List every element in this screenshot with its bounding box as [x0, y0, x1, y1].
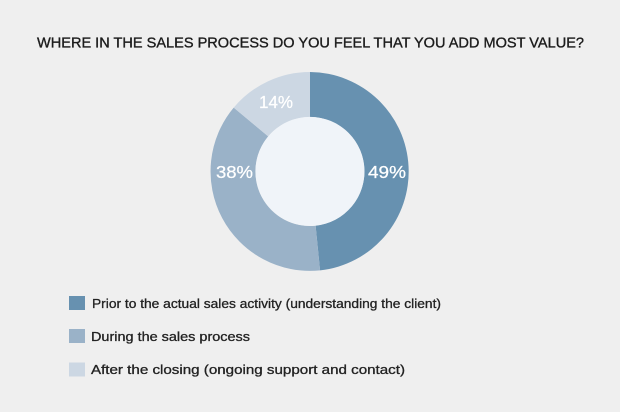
legend item: after: After the closing (ongoing support and contact)	[91, 362, 405, 377]
segment: after 14%	[234, 72, 310, 136]
legend item: during: During the sales process	[91, 329, 250, 344]
segment: prior 49%	[310, 72, 409, 270]
title: WHERE IN THE SALES PROCESS DO YOU FEEL THAT YOU ADD MOST VALUE?	[37, 36, 584, 52]
donut chart	[211, 72, 409, 271]
label: 38%: 38%	[216, 162, 253, 182]
segment: during 38%	[211, 108, 320, 271]
donut centre	[256, 117, 364, 226]
label: 49%: 49%	[368, 162, 406, 182]
legend	[69, 296, 441, 377]
label: 14%: 14%	[259, 92, 293, 112]
legend item: prior: Prior to the actual sales activity (understanding the client)	[92, 296, 441, 311]
